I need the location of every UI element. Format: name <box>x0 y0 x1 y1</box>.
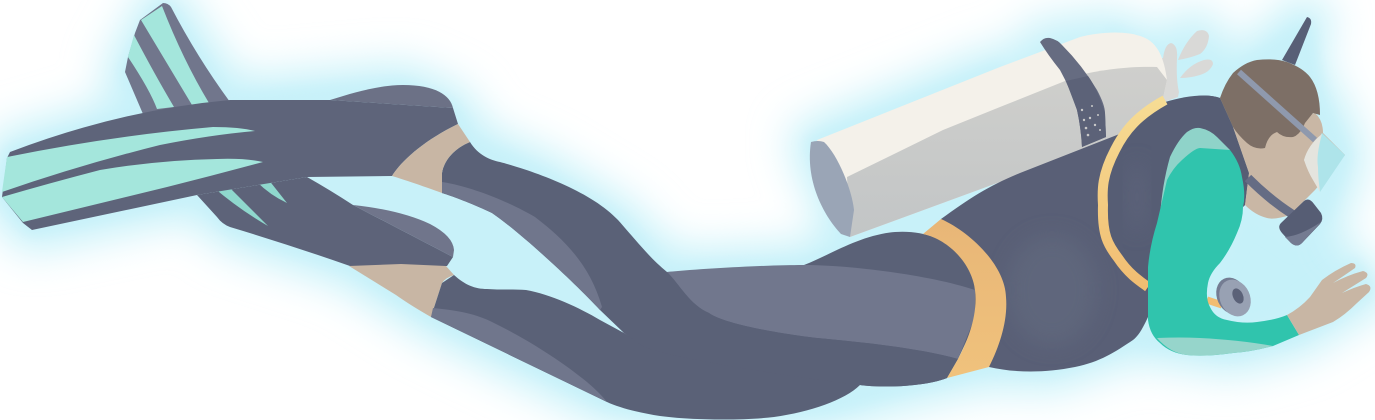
snorkel <box>1282 17 1311 65</box>
arm shadow sleeve <box>1160 128 1230 217</box>
waist band <box>923 219 1006 378</box>
head <box>1220 59 1345 246</box>
lower ankle <box>349 264 454 317</box>
lower fin <box>197 177 454 266</box>
mouthpiece <box>1279 200 1322 246</box>
gap fill between limbs <box>300 130 1140 350</box>
air hose <box>1103 100 1165 287</box>
hand <box>1287 263 1370 335</box>
air tank <box>810 32 1167 237</box>
mouthpiece strap <box>1248 178 1292 214</box>
strap speckles <box>1081 105 1101 136</box>
tank end cap <box>810 141 854 237</box>
front fin lower stripe <box>2 159 263 222</box>
lower fin stripes <box>213 185 268 226</box>
mask skirt <box>1304 134 1322 192</box>
arm <box>1148 148 1299 356</box>
front fin upper stripe <box>2 127 255 192</box>
mask glass <box>1304 133 1345 192</box>
torso <box>941 95 1249 371</box>
tank strap <box>1040 38 1106 147</box>
hose to regulator <box>1207 300 1222 305</box>
upper leg highlight <box>442 182 602 310</box>
sleeve lower highlight <box>1157 338 1273 356</box>
thigh highlight <box>667 265 975 359</box>
face <box>1233 113 1345 219</box>
vest <box>1105 95 1249 292</box>
lower fin heel <box>353 205 454 257</box>
mask strap <box>1239 72 1315 140</box>
regulator ring <box>1210 272 1257 322</box>
hair <box>1220 59 1320 148</box>
upper leg <box>442 142 958 387</box>
tank shadow <box>847 67 1167 237</box>
torso highlight <box>1007 235 1097 345</box>
tank valve and air bubbles <box>1150 30 1213 105</box>
lower leg <box>431 275 860 420</box>
back fin <box>125 3 230 114</box>
front fin <box>2 85 458 230</box>
lower leg highlight <box>431 308 607 402</box>
upper ankle <box>392 124 470 193</box>
hips and thigh <box>667 232 975 387</box>
fin stripes <box>128 6 209 109</box>
